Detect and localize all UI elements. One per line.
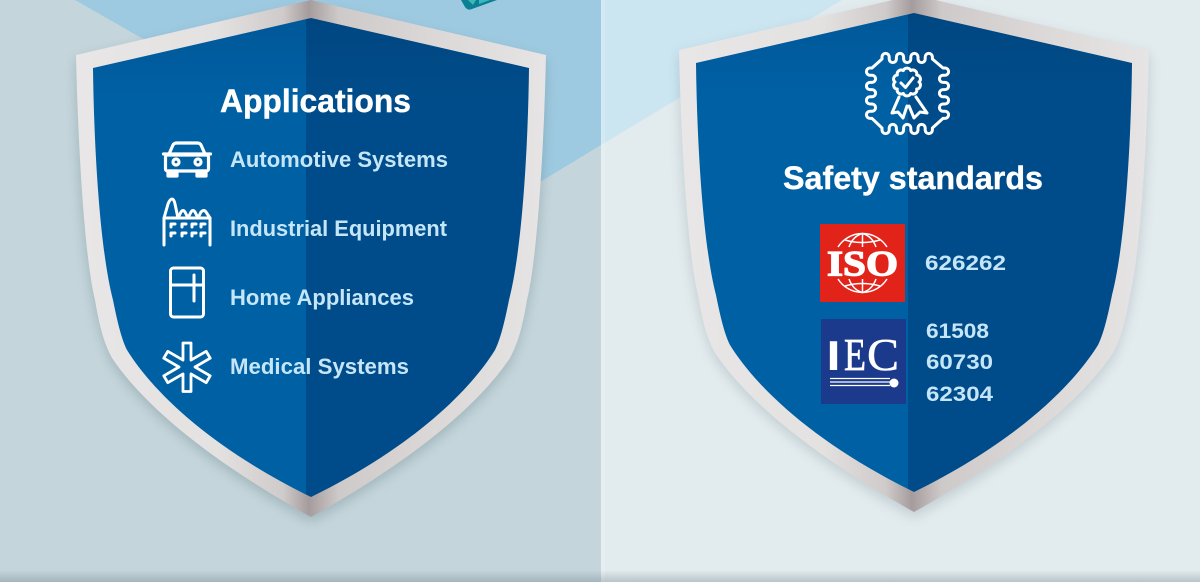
text: IEC standard numbers — [926, 320, 993, 406]
text: IEC standard numbers: 61508 — [926, 320, 989, 343]
teal device fragment — [461, 0, 497, 10]
text: ISO standard number: 626262 — [925, 252, 1006, 275]
logo: IEC: E — [844, 329, 866, 380]
shield metal frame — [679, 0, 1149, 512]
logo: IEC: C — [867, 329, 899, 380]
logo: IEC — [821, 319, 906, 404]
label: Home Appliances: Home Appliances — [230, 285, 414, 310]
icon: certified chip — [866, 53, 949, 134]
panel background: right — [601, 0, 1200, 582]
heading: Applications: Applications — [220, 83, 411, 119]
icon: car — [164, 143, 210, 176]
shield blue face — [90, 15, 532, 500]
shield metal frame — [76, 0, 546, 517]
logo: IEC: I — [826, 332, 840, 379]
icon: medical star — [164, 343, 210, 392]
label: Automotive Systems: Automotive Systems — [230, 147, 448, 172]
logo: ISO: ISO — [827, 244, 898, 284]
icon: refrigerator — [170, 268, 204, 317]
panel: safety standards shield — [679, 0, 1149, 517]
text: IEC standard numbers: 62304 — [926, 383, 993, 406]
label: Industrial Equipment: Industrial Equipment — [230, 216, 448, 241]
heading: Safety standards: Safety standards — [783, 160, 1043, 196]
panel: applications shield — [76, 0, 546, 522]
logo: ISO — [820, 224, 905, 302]
label: Medical Systems: Medical Systems — [230, 354, 409, 379]
text: IEC standard numbers: 60730 — [926, 351, 993, 374]
panel background: left — [0, 0, 601, 582]
shield blue face — [693, 10, 1135, 495]
shield shadow — [76, 6, 546, 522]
shield shadow — [679, 1, 1149, 517]
icon: factory — [164, 199, 210, 245]
